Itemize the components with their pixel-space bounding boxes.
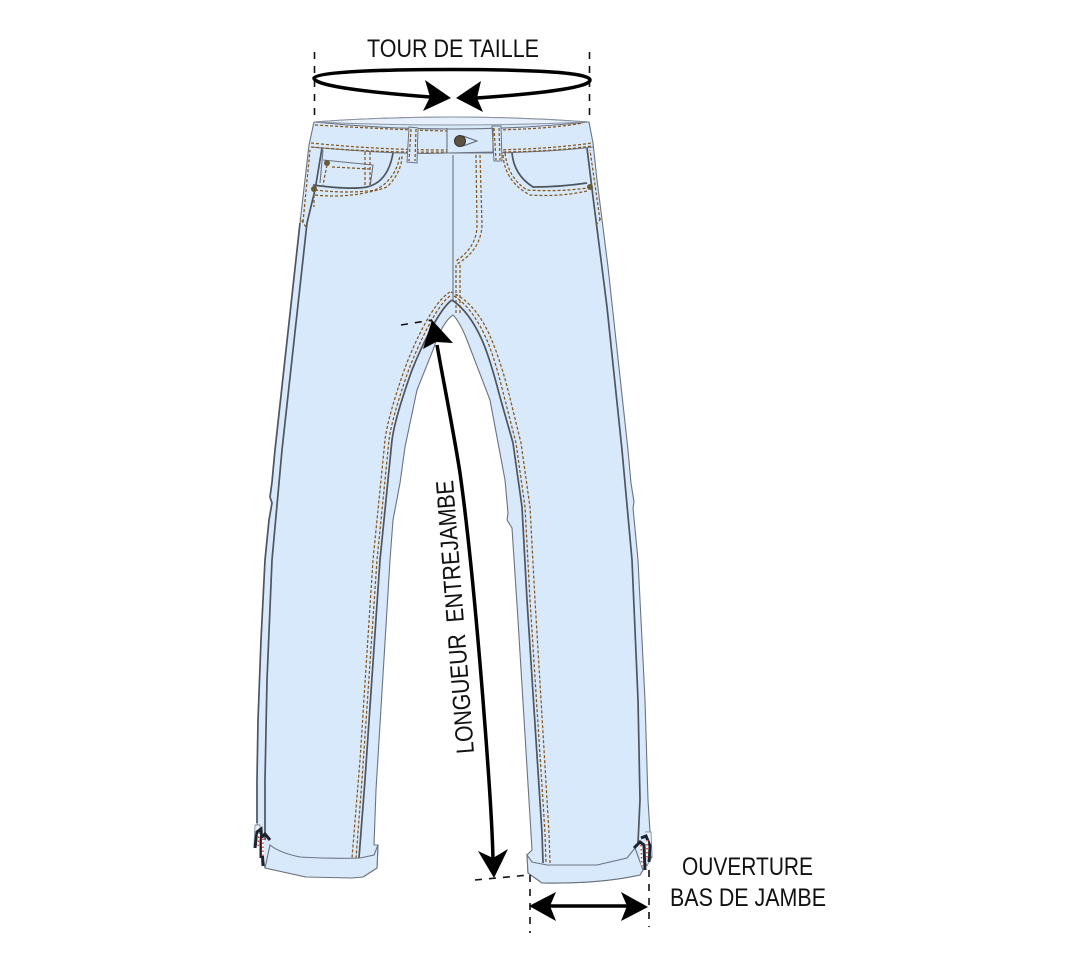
label: ouverture bas de jambe: BAS DE JAMBE [670, 884, 826, 912]
inseam guide lines [401, 320, 529, 880]
right cuff [527, 832, 652, 883]
leg opening measurement [529, 853, 826, 933]
fly and button [447, 128, 493, 313]
label: longueur entrejambe: LONGUEUR ENTREJAMBE [431, 479, 480, 755]
inseams [352, 292, 550, 863]
right pocket [503, 153, 593, 196]
label: ouverture bas de jambe: OUVERTURE [682, 853, 813, 881]
side seams [257, 148, 640, 843]
heading: tour de taille: TOUR DE TAILLE [367, 35, 539, 63]
arrow: leg opening [529, 892, 648, 921]
arrow: inseam [423, 320, 508, 878]
belt loops [407, 126, 502, 163]
left pocket [311, 150, 402, 207]
jeans body [257, 117, 652, 883]
arrow: waist loop [314, 70, 590, 112]
inseam measurement [401, 320, 529, 880]
waist measurement [314, 35, 590, 122]
waist guide lines [314, 52, 590, 122]
opening guide lines [530, 870, 649, 933]
left cuff [254, 825, 378, 878]
waistband [311, 117, 593, 153]
label: ouverture bas de jambe [670, 853, 826, 912]
jeans illustration [254, 117, 652, 883]
